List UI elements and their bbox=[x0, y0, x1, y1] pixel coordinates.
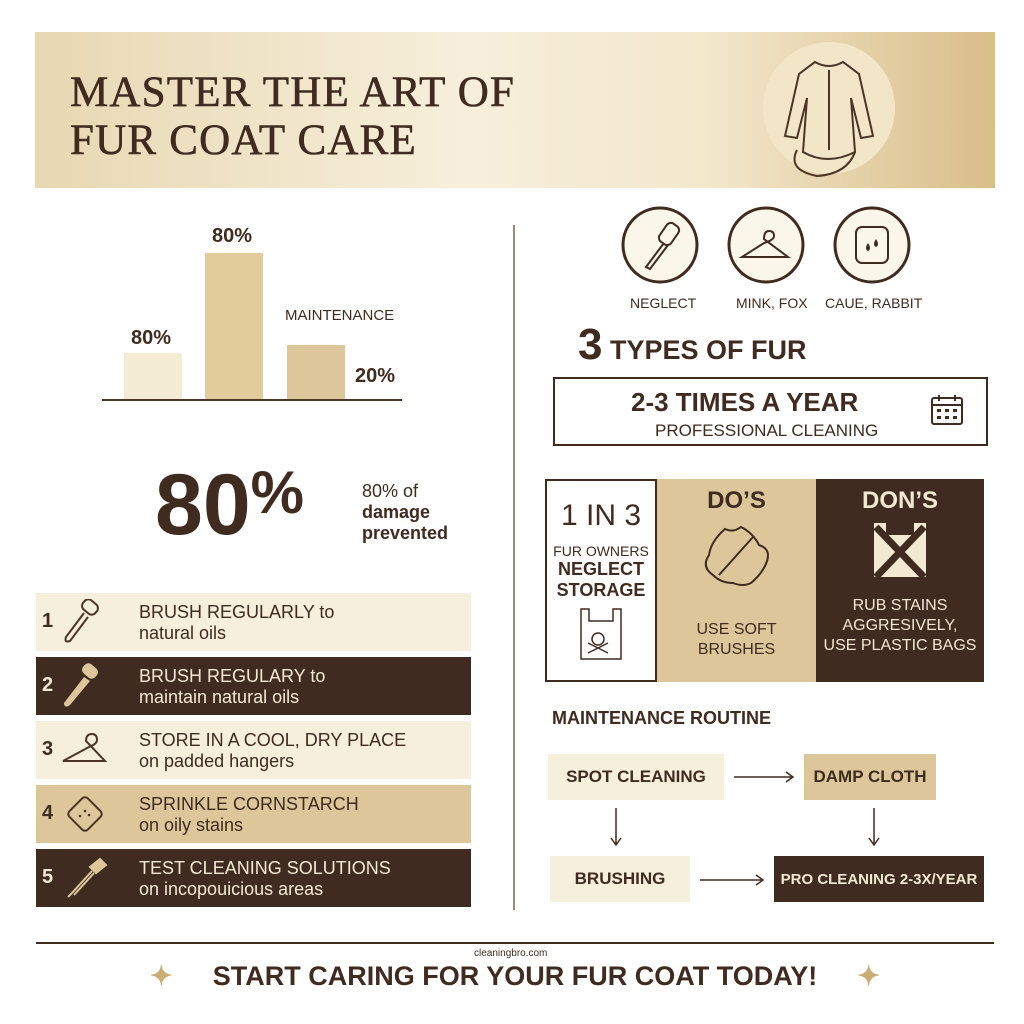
title: MASTER THE ART OF bbox=[70, 69, 515, 116]
bar chart: 80% bbox=[131, 327, 171, 349]
bar chart: 20% bbox=[355, 365, 395, 387]
footer call to action: ✦ bbox=[857, 961, 880, 991]
panel: neglect stat: FUR OWNERS bbox=[553, 543, 649, 559]
tip 5: on incopouicious areas bbox=[139, 879, 323, 899]
panel: do's: USE SOFT bbox=[696, 621, 776, 638]
fur type icons: CAUE, RABBIT bbox=[825, 295, 922, 311]
fur type icons: MINK, FOX bbox=[736, 295, 808, 311]
tip 3 bbox=[36, 721, 471, 779]
big stat 80%: damage bbox=[362, 502, 430, 522]
text: cleaningbro.com bbox=[474, 948, 547, 959]
callout: cleaning frequency: 2-3 TIMES A YEAR bbox=[631, 387, 858, 417]
flow: maintenance routine: BRUSHING bbox=[575, 869, 665, 888]
footer call to action: ✦ bbox=[150, 961, 173, 991]
big stat 80%: 80% of bbox=[362, 481, 418, 501]
icon: cloth bbox=[834, 206, 910, 284]
heading: 3 types of fur: 3 TYPES OF FUR bbox=[578, 320, 807, 369]
tip 2: 2 bbox=[42, 674, 53, 696]
fur type icons bbox=[622, 206, 922, 311]
tip 2: BRUSH REGULARY to bbox=[139, 666, 325, 686]
icon: bag with skull bbox=[580, 608, 622, 660]
tip 5 bbox=[36, 849, 471, 907]
vertical divider bbox=[513, 225, 515, 910]
footer call to action: START CARING FOR YOUR FUR COAT TODAY! bbox=[213, 961, 817, 991]
panel: don'ts: DON’S bbox=[862, 487, 938, 514]
icon: hanger bbox=[728, 206, 804, 284]
tip 1 bbox=[36, 593, 471, 651]
callout: cleaning frequency: PROFESSIONAL CLEANING bbox=[655, 421, 878, 440]
title bbox=[70, 69, 515, 164]
icon: crossed bag bbox=[874, 523, 926, 577]
tip 3: 3 bbox=[42, 738, 53, 760]
icon: brush bbox=[622, 206, 698, 284]
heading: maintenance routine: MAINTENANCE ROUTINE bbox=[552, 708, 771, 728]
bar chart: 80% bbox=[212, 225, 252, 247]
tip 4: SPRINKLE CORNSTARCH bbox=[139, 794, 359, 814]
icon: fur coat bbox=[763, 42, 895, 177]
bar chart: MAINTENANCE bbox=[285, 307, 394, 324]
tip 4: 4 bbox=[42, 802, 53, 824]
flow: maintenance routine: SPOT CLEANING bbox=[566, 767, 706, 786]
flow: maintenance routine bbox=[548, 754, 984, 902]
panel: neglect stat: 1 IN 3 bbox=[561, 499, 641, 532]
flow: maintenance routine: DAMP CLOTH bbox=[813, 767, 926, 786]
panel: do's: DO’S bbox=[707, 487, 766, 514]
fur type icons: NEGLECT bbox=[630, 295, 696, 311]
panel: neglect stat: NEGLECT bbox=[558, 559, 644, 579]
list of tips bbox=[36, 593, 471, 907]
panel: don'ts: RUB STAINS bbox=[853, 597, 947, 614]
panel: do's: BRUSHES bbox=[698, 641, 775, 658]
tip 5: TEST CLEANING SOLUTIONS bbox=[139, 858, 391, 878]
bar chart bbox=[102, 225, 402, 401]
tip 5: 5 bbox=[42, 866, 53, 888]
icon: calendar bbox=[931, 395, 963, 425]
tip 4 bbox=[36, 785, 471, 843]
tip 3: on padded hangers bbox=[139, 751, 294, 771]
tip 2 bbox=[36, 657, 471, 715]
flow: maintenance routine: PRO CLEANING 2-3X/YEAR bbox=[781, 870, 977, 888]
panel: don'ts: USE PLASTIC BAGS bbox=[824, 637, 976, 654]
big stat 80% bbox=[155, 457, 448, 553]
big stat 80%: prevented bbox=[362, 523, 448, 543]
tip 1: BRUSH REGULARLY to bbox=[139, 602, 334, 622]
tip 1: natural oils bbox=[139, 623, 226, 643]
tip 1: 1 bbox=[42, 610, 53, 632]
footer divider bbox=[36, 942, 994, 944]
tip 3: STORE IN A COOL, DRY PLACE bbox=[139, 730, 406, 750]
tip 2: maintain natural oils bbox=[139, 687, 299, 707]
panel: don'ts bbox=[816, 479, 984, 682]
icon: sponge bbox=[704, 526, 769, 586]
panel: neglect stat bbox=[545, 479, 657, 682]
header banner bbox=[35, 32, 995, 188]
panel: neglect stat: STORAGE bbox=[557, 580, 645, 600]
title: FUR COAT CARE bbox=[70, 117, 417, 164]
panel: don'ts: AGGRESIVELY, bbox=[842, 617, 958, 634]
big stat 80%: 80% bbox=[155, 457, 304, 553]
panel: do's bbox=[657, 479, 816, 682]
callout: cleaning frequency bbox=[553, 377, 988, 446]
tip 4: on oily stains bbox=[139, 815, 243, 835]
